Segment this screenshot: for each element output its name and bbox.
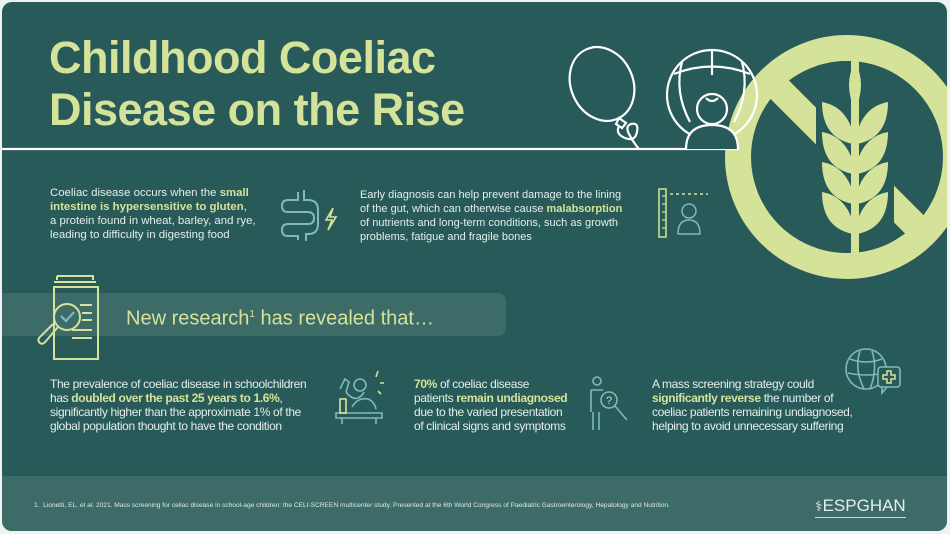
text block: prevalence: significantly higher than the approximate 1% of the: [50, 405, 301, 419]
text block: early diagnosis: problems, fatigue and fragile bones: [360, 231, 532, 243]
text block: prevalence: The prevalence of coeliac disease in schoolchildren: [50, 377, 306, 391]
text block: definition: Coeliac disease occurs when the small: [50, 187, 249, 199]
icon: child raising hand: [335, 370, 384, 424]
text block: undiagnosed: 70% of coeliac disease: [414, 377, 529, 391]
footnote: 1. Lionetti, EL, et al. 2021. Mass screening for celiac disease in school-age children: the CELI-SCREEN multicenter study. Presented at the 6th World Congress of Paediatric Gastroenterology, Hepatology and Nutrition.: [34, 502, 670, 509]
text block: undiagnosed: due to the varied presentation: [414, 405, 562, 419]
title: [49, 32, 465, 135]
title: Childhood Coeliac: [49, 32, 436, 83]
text block: prevalence: [50, 377, 306, 433]
text block: early diagnosis: [360, 189, 622, 243]
text block: mass screening: significantly reverse the number of: [652, 391, 833, 405]
text block: prevalence: has doubled over the past 25 years to 1.6%,: [50, 391, 282, 405]
text block: mass screening: coeliac patients remaining undiagnosed,: [652, 405, 852, 419]
icon: globe with medical cross: [845, 348, 901, 396]
icon: document with magnifier: [37, 275, 99, 360]
banner heading: New research1 has revealed that…: [126, 308, 434, 330]
footer: [2, 476, 947, 531]
text block: definition: leading to difficulty in digesting food: [50, 229, 230, 241]
text block: undiagnosed: [414, 377, 567, 433]
text block: definition: a protein found in wheat, barley, and rye,: [50, 215, 256, 227]
text block: definition: [50, 187, 256, 241]
text block: early diagnosis: of the gut, which can otherwise cause malabsorption: [360, 203, 622, 215]
icon: no-gluten sign: [725, 35, 947, 279]
text block: prevalence: global population thought to have the condition: [50, 419, 282, 433]
text block: mass screening: A mass screening strategy could: [652, 377, 814, 391]
text block: mass screening: helping to avoid unnecessary suffering: [652, 419, 843, 433]
title: Disease on the Rise: [49, 84, 465, 135]
logo: ESPGHAN: ⚕ESPGHAN: [815, 496, 906, 515]
divider line and icons: balloon and child: [2, 46, 758, 150]
icon: person with magnifier: ?: [606, 395, 612, 407]
text block: definition: intestine is hypersensitive to gluten,: [50, 201, 247, 213]
text block: early diagnosis: Early diagnosis can help prevent damage to the lining: [360, 189, 621, 201]
icon: growth ruler: [658, 188, 708, 238]
text block: undiagnosed: of clinical signs and symptoms: [414, 419, 566, 433]
text block: undiagnosed: patients remain undiagnosed: [414, 391, 567, 405]
icon: person with magnifier: [590, 376, 628, 430]
text block: mass screening: [652, 377, 852, 433]
icon: intestine: [281, 190, 338, 241]
banner: new research: [2, 293, 506, 336]
text block: early diagnosis: of nutrients and long-term conditions, such as growth: [360, 217, 618, 229]
